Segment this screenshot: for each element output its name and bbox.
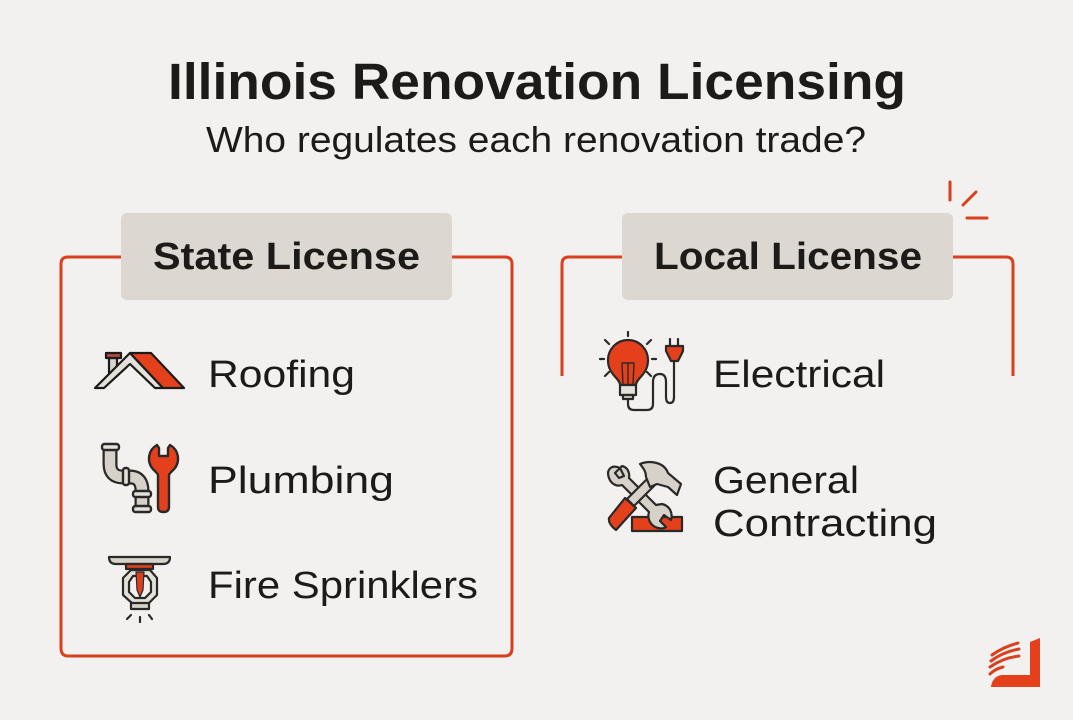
icon: light bulb and plug (600, 332, 683, 410)
label: roofing: Roofing (208, 354, 355, 396)
panel: local license (562, 213, 1013, 545)
label: general contracting: General (713, 460, 859, 502)
heading: local license: Local License (654, 236, 922, 278)
label: general contracting: Contracting (713, 503, 937, 545)
subtitle: Who regulates each renovation trade? (206, 119, 866, 160)
panel frame: local license (562, 257, 1013, 376)
heading: local license (622, 213, 953, 300)
panel frame: state license (61, 257, 512, 656)
label: electrical: Electrical (713, 354, 885, 396)
title: Illinois Renovation Licensing (168, 53, 906, 110)
label: general contracting (713, 460, 937, 545)
icon: roof (95, 353, 184, 388)
icon: spark accent (950, 182, 987, 218)
icon: tools (608, 462, 682, 531)
heading: state license: State License (153, 236, 420, 278)
label: plumbing: Plumbing (208, 460, 394, 502)
logo (990, 638, 1040, 687)
label: fire sprinklers: Fire Sprinklers (208, 565, 478, 607)
icon: sprinkler (109, 557, 170, 622)
heading: state license (121, 213, 452, 300)
panel: state license (61, 213, 512, 656)
icon: pipe and wrench (102, 444, 178, 512)
